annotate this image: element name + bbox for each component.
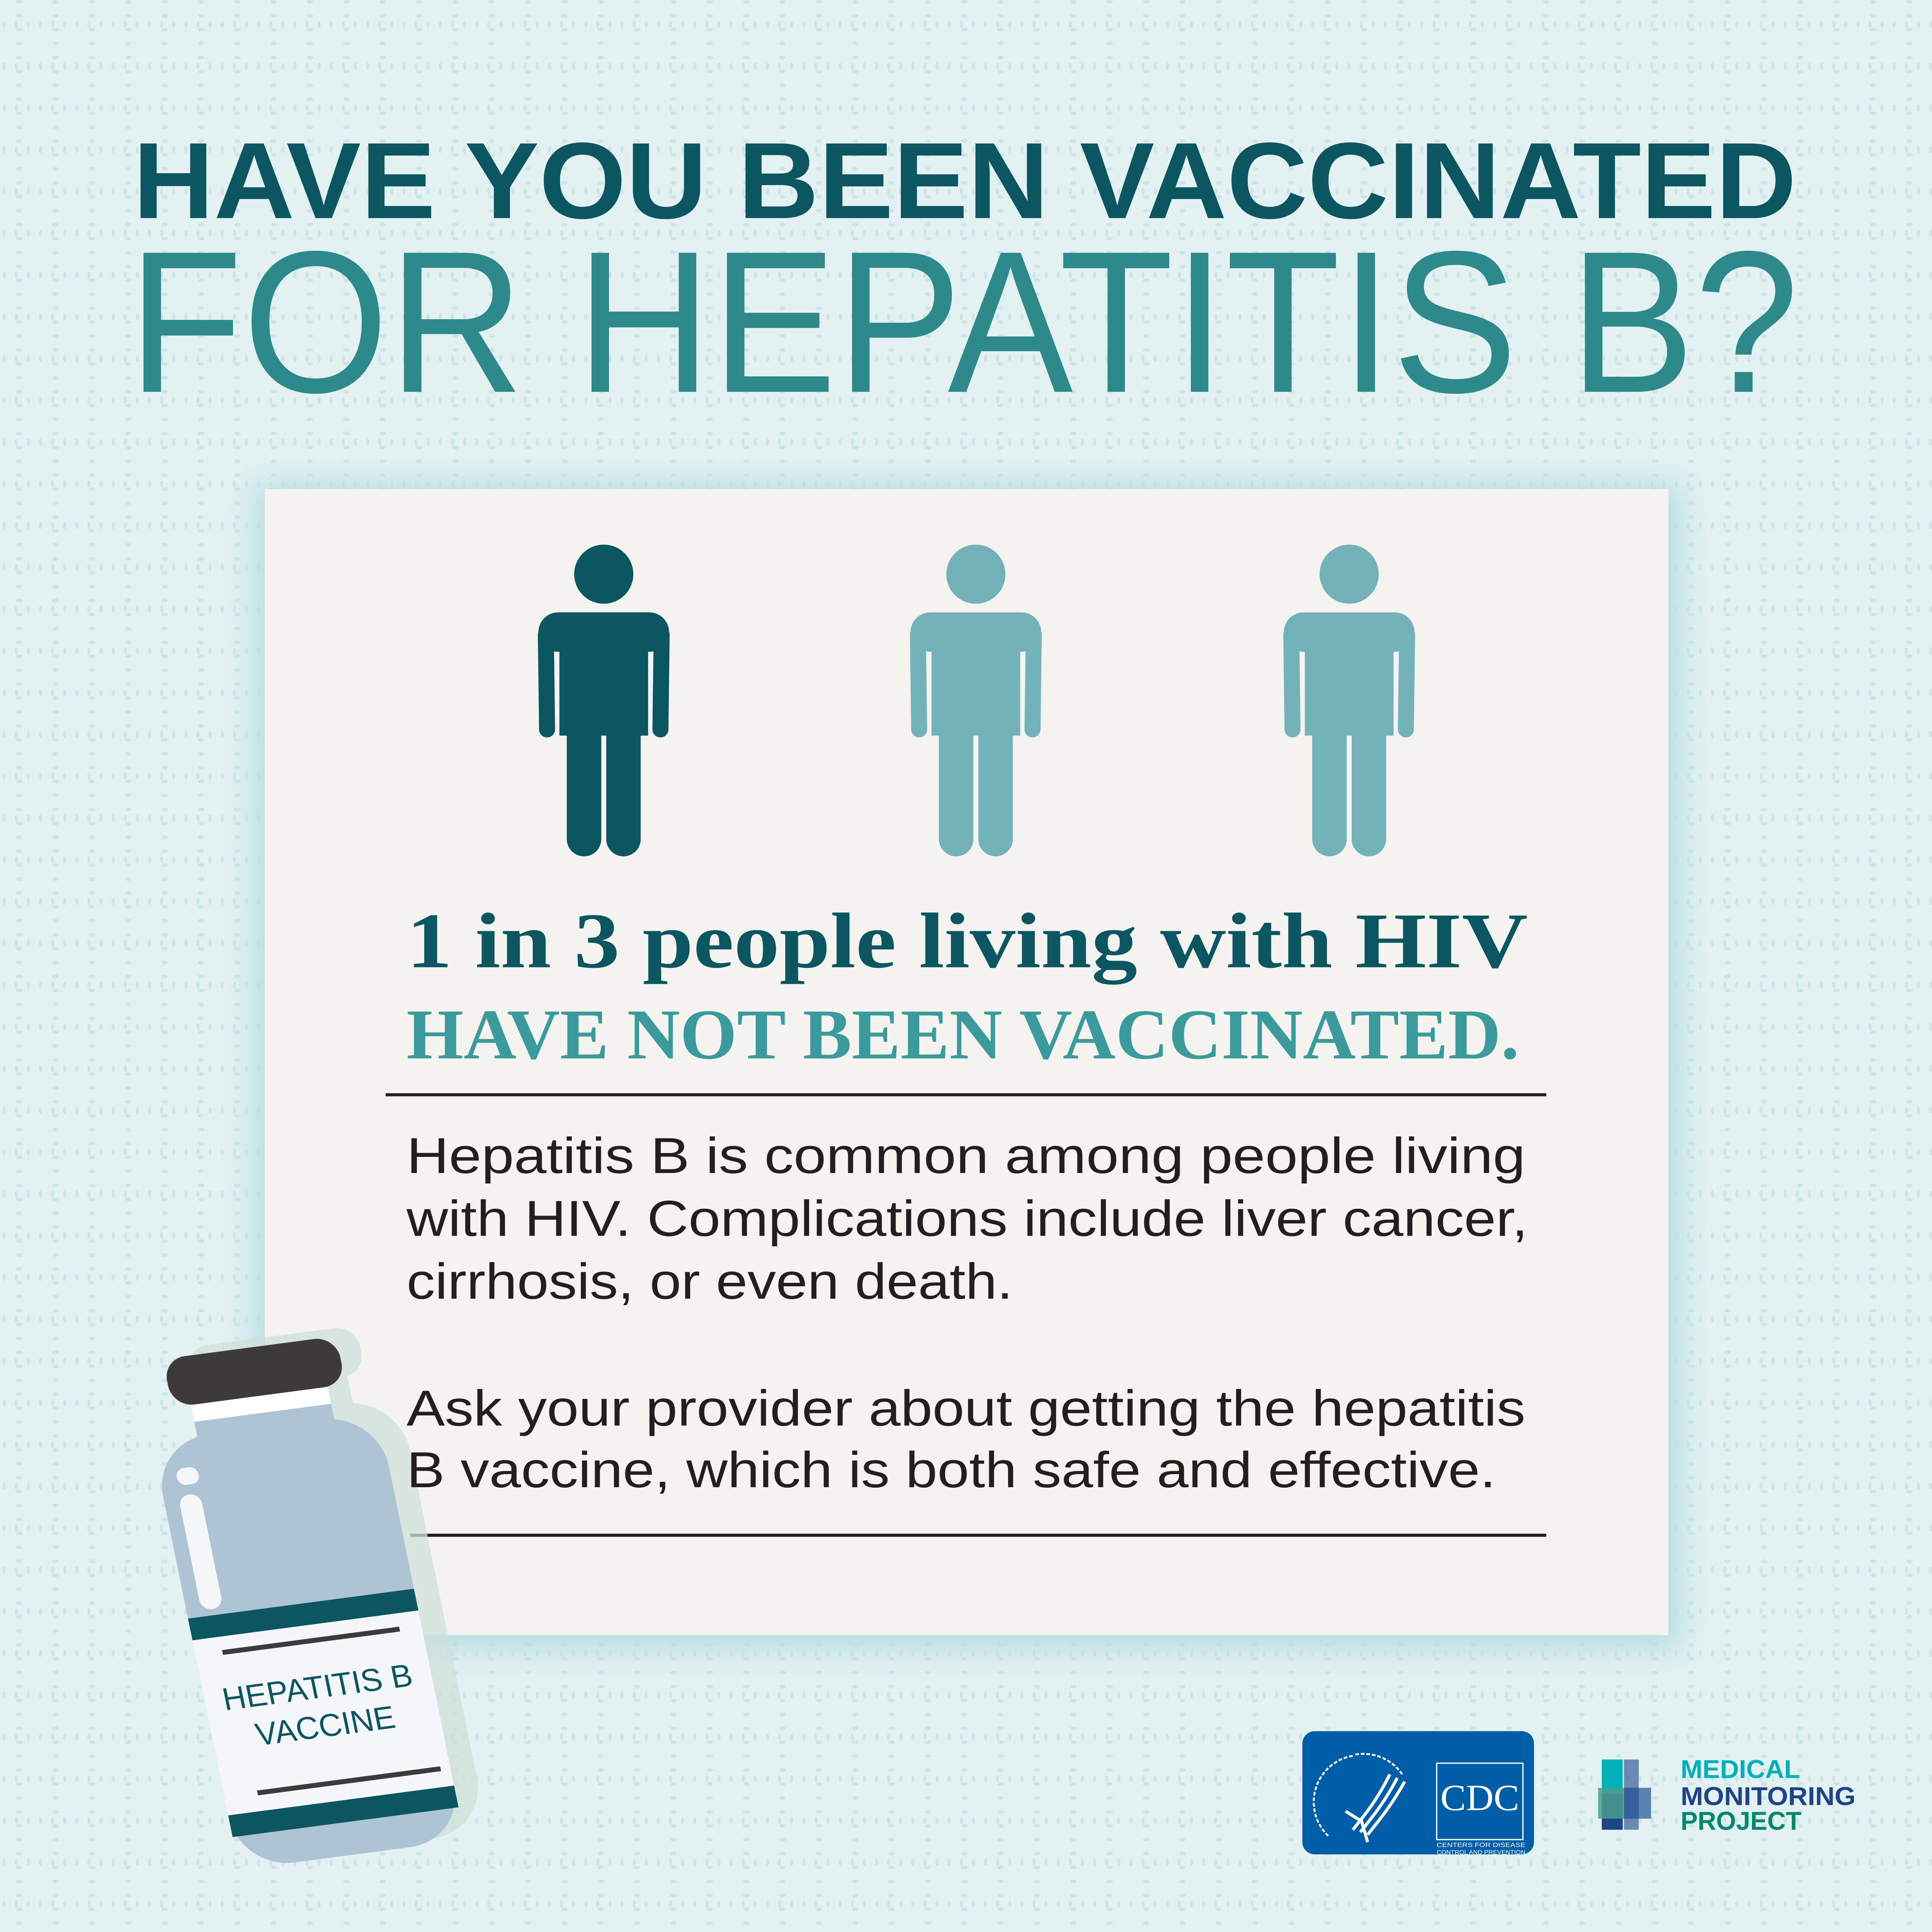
logo: Medical Monitoring Project: MONITORING xyxy=(1680,1782,1855,1811)
logo: Medical Monitoring Project xyxy=(1598,1755,1855,1835)
stat heading xyxy=(406,897,1528,1074)
title: HAVE YOU BEEN VACCINATED xyxy=(133,120,1796,241)
icon: people (1 of 3 highlighted) xyxy=(538,544,1415,856)
icon: hepatitis B vaccine vial: HEPATITIS B xyxy=(219,1657,416,1717)
icon: hepatitis B vaccine vial xyxy=(136,1321,488,1870)
icon: hepatitis B vaccine vial: VACCINE xyxy=(252,1699,398,1753)
text block: body copy xyxy=(406,1128,1528,1498)
text block: body copy: Ask your provider about getting the hepatitis xyxy=(406,1380,1526,1436)
CDC mark: CENTERS FOR DISEASE xyxy=(1437,1842,1526,1849)
text block: body copy: Hepatitis B is common among people living xyxy=(406,1128,1526,1184)
logo: Medical Monitoring Project: MEDICAL xyxy=(1680,1755,1800,1784)
panel: main card xyxy=(253,483,1682,1651)
stat heading: HAVE NOT BEEN VACCINATED. xyxy=(406,995,1519,1074)
text block: body copy: B vaccine, which is both safe and effective. xyxy=(406,1442,1496,1498)
CDC mark: CDC xyxy=(1440,1777,1519,1818)
CDC mark: CONTROL AND PREVENTION xyxy=(1437,1849,1526,1856)
icon: MMP mark xyxy=(1598,1760,1651,1830)
text block: body copy: with HIV. Complications include liver cancer, xyxy=(406,1190,1528,1247)
logo: Medical Monitoring Project: PROJECT xyxy=(1680,1806,1801,1835)
icon: HHS eagle xyxy=(1314,1754,1405,1842)
logo: HHS / CDC xyxy=(1303,1731,1534,1856)
CDC mark xyxy=(1437,1763,1526,1856)
stat heading: 1 in 3 people living with HIV xyxy=(406,897,1528,985)
title: FOR HEPATITIS B? xyxy=(128,209,1799,435)
text block: body copy: cirrhosis, or even death. xyxy=(406,1253,1013,1310)
title xyxy=(128,120,1799,435)
